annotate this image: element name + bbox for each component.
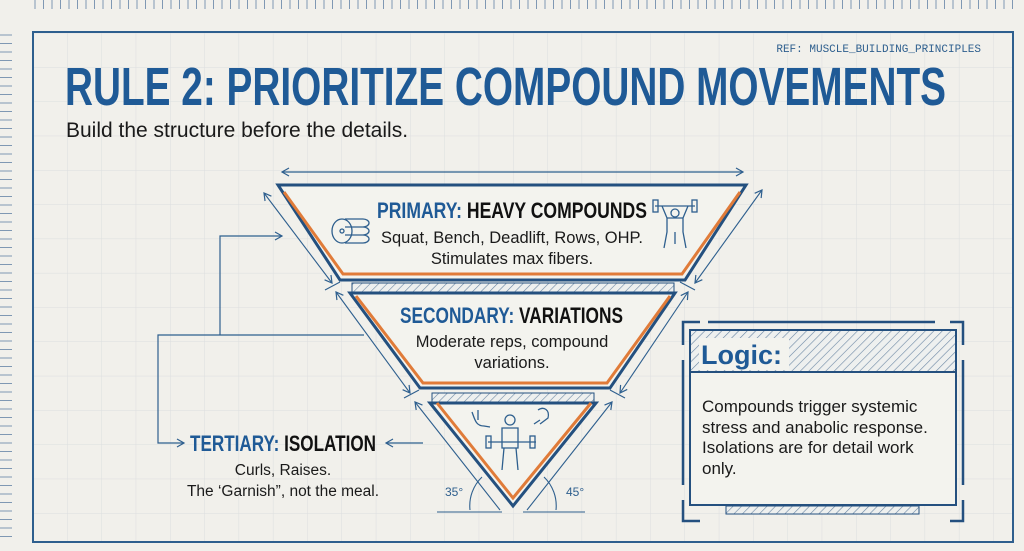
inverted pyramid: 35° xyxy=(445,485,463,499)
logic text: only. xyxy=(702,459,737,478)
logic text: stress and anabolic response. xyxy=(702,418,928,437)
tier 1: primary xyxy=(278,185,746,280)
tertiary label: The ‘Garnish”, not the meal. xyxy=(187,483,379,500)
tier 2: secondary xyxy=(350,283,675,388)
angle marks xyxy=(437,477,585,512)
icon: isolation lifter xyxy=(472,408,548,470)
logic text: Compounds trigger systemic xyxy=(702,397,918,416)
tier 2: secondary: variations. xyxy=(474,354,550,372)
tier 1: primary: Squat, Bench, Deadlift, Rows, OHP. xyxy=(381,229,643,247)
inverted pyramid: 45° xyxy=(566,485,584,499)
subtitle: Build the structure before the details. xyxy=(66,119,408,142)
top dimension arrow xyxy=(282,171,743,173)
tertiary label: TERTIARY: ISOLATION xyxy=(190,431,376,456)
inverted pyramid xyxy=(264,185,762,512)
outer dimension lines xyxy=(264,190,762,510)
logic heading: Logic: xyxy=(701,340,782,370)
tier 2: secondary: Moderate reps, compound xyxy=(416,333,608,351)
tier 2: secondary: SECONDARY: VARIATIONS xyxy=(400,303,623,328)
tier 3: tertiary xyxy=(430,393,596,506)
tertiary label: Curls, Raises. xyxy=(235,462,331,479)
reference tag: REF: MUSCLE_BUILDING_PRINCIPLES xyxy=(776,44,981,56)
icon: overhead lifter xyxy=(653,200,697,248)
logic panel xyxy=(683,322,963,521)
connector lines xyxy=(158,236,423,443)
tier 1: primary: Stimulates max fibers. xyxy=(431,250,593,268)
icon: weight plates xyxy=(332,219,369,243)
tertiary label xyxy=(187,431,379,500)
logic text: Isolations are for detail work xyxy=(702,438,914,457)
tier 1: primary: PRIMARY: HEAVY COMPOUNDS xyxy=(377,198,647,223)
